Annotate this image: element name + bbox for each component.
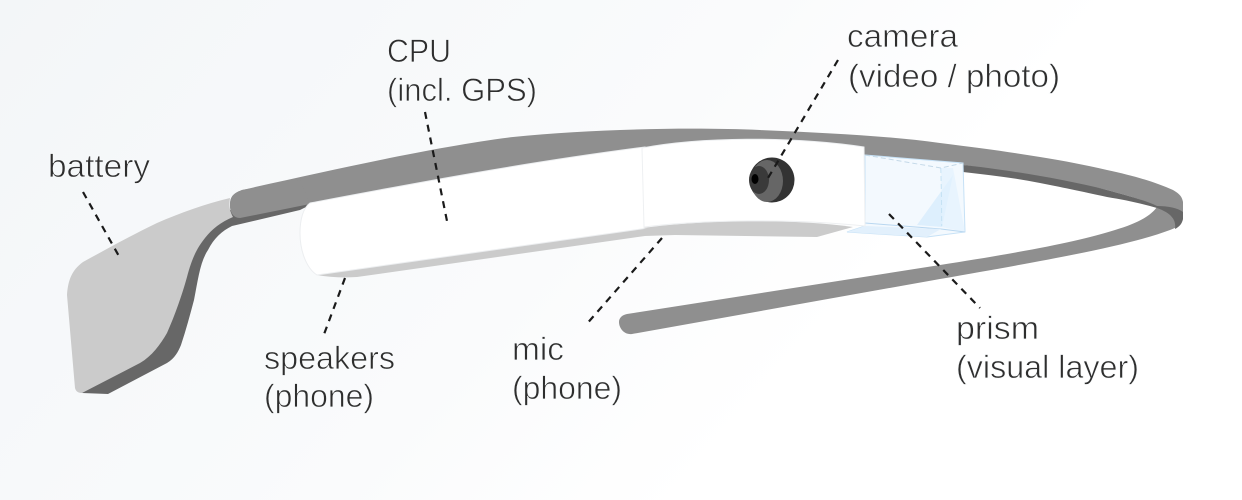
- leader: speakers: [323, 278, 345, 337]
- front housing: [642, 139, 865, 237]
- front housing body: [642, 139, 865, 227]
- label: mic: (phone): [512, 370, 622, 406]
- frame inner shadow: [963, 165, 1183, 229]
- leader: camera: [768, 60, 838, 178]
- frame end over pod: [230, 180, 310, 218]
- CPU housing underside: [317, 224, 690, 277]
- label: CPU: (incl. GPS): [387, 72, 537, 108]
- icon: camera lens: [749, 158, 794, 202]
- battery pod: [67, 180, 312, 394]
- label: camera: [847, 18, 1060, 94]
- label: camera: camera: [847, 18, 958, 54]
- leader: CPU: [425, 112, 448, 226]
- leader lines: [83, 60, 980, 337]
- label: speakers: [264, 340, 395, 414]
- label: speakers: (phone): [264, 378, 374, 414]
- label: prism: (visual layer): [956, 349, 1139, 385]
- CPU housing body: [300, 147, 648, 275]
- label: prism: [956, 310, 1139, 385]
- label: camera: (video / photo): [848, 58, 1060, 94]
- CPU housing: [300, 147, 690, 277]
- label: battery: battery: [48, 148, 150, 184]
- label: mic: [512, 331, 622, 406]
- prism: [847, 155, 965, 237]
- label: CPU: CPU: [387, 33, 451, 69]
- prism reflective facet: [917, 175, 953, 227]
- leader: battery: [83, 192, 120, 258]
- leader: prism: [889, 214, 980, 308]
- frame band: [230, 129, 1183, 334]
- label: CPU: [387, 33, 537, 108]
- battery pod shadow side: [82, 204, 312, 394]
- battery pod body: [67, 198, 233, 393]
- label: mic: mic: [512, 331, 564, 367]
- label: prism: prism: [956, 310, 1039, 346]
- leader: mic: [585, 238, 662, 326]
- label: speakers: speakers: [264, 340, 395, 376]
- front housing underside: [643, 221, 853, 237]
